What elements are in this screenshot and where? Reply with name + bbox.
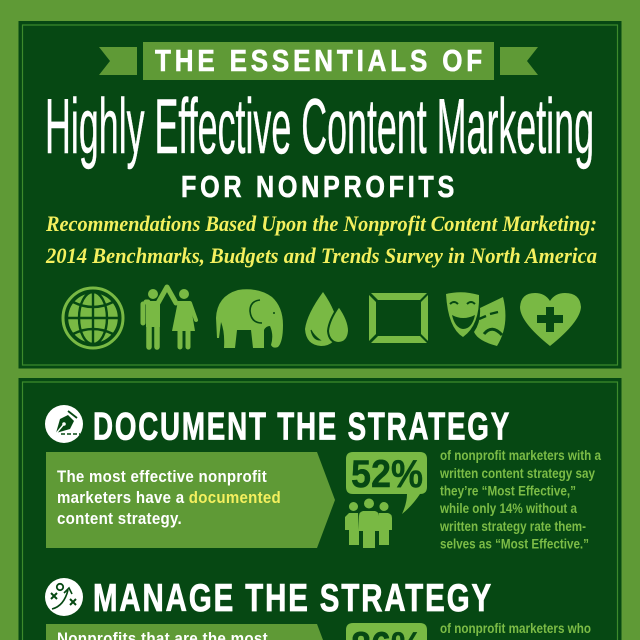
heading: MANAGE THE STRATEGY xyxy=(93,577,493,620)
script description: 2014 Benchmarks, Budgets and Trends Survey in North America xyxy=(45,243,597,268)
panel: recommendations xyxy=(18,378,622,640)
panel: header xyxy=(18,21,622,368)
icon: playbook xyxy=(45,578,83,616)
stat description: they’re “Most Effective,” xyxy=(440,482,576,498)
stat description: written strategy rate them- xyxy=(439,518,586,534)
arrow callout xyxy=(46,452,335,548)
script description xyxy=(45,211,597,268)
section: manage the strategy xyxy=(45,577,591,640)
stat description: while only 14% without a xyxy=(439,500,577,516)
arrow callout: content strategy. xyxy=(57,510,182,528)
icon: globe xyxy=(63,288,123,348)
stat bubble: 52% xyxy=(346,452,427,514)
arrow callout xyxy=(46,624,323,640)
ribbon banner: THE ESSENTIALS OF xyxy=(155,44,486,78)
arrow callout: marketers have a documented xyxy=(57,489,281,507)
arrow callout: The most effective nonprofit xyxy=(57,468,267,486)
icon: people xyxy=(345,498,392,548)
stat bubble: 52%: 52% xyxy=(351,453,423,496)
stat description: of nonprofit marketers who xyxy=(440,620,591,636)
icon: water drops xyxy=(305,292,349,346)
icon: picture frame xyxy=(369,293,428,343)
stat description: written content strategy say xyxy=(439,465,595,481)
icon: heart with cross xyxy=(520,293,581,346)
stat description: selves as “Most Effective.” xyxy=(440,536,589,552)
icon: man and woman high five xyxy=(143,287,196,347)
stat description: of nonprofit marketers with a xyxy=(440,447,601,463)
icon: elephant xyxy=(216,289,283,348)
subtitle: FOR NONPROFITS xyxy=(181,170,458,204)
icon: pen nib xyxy=(45,405,83,443)
script description: Recommendations Based Upon the Nonprofit Content Marketing: xyxy=(45,211,597,236)
icon: theatre masks xyxy=(446,292,505,346)
section: document the strategy xyxy=(45,405,601,552)
stat description xyxy=(439,447,601,552)
